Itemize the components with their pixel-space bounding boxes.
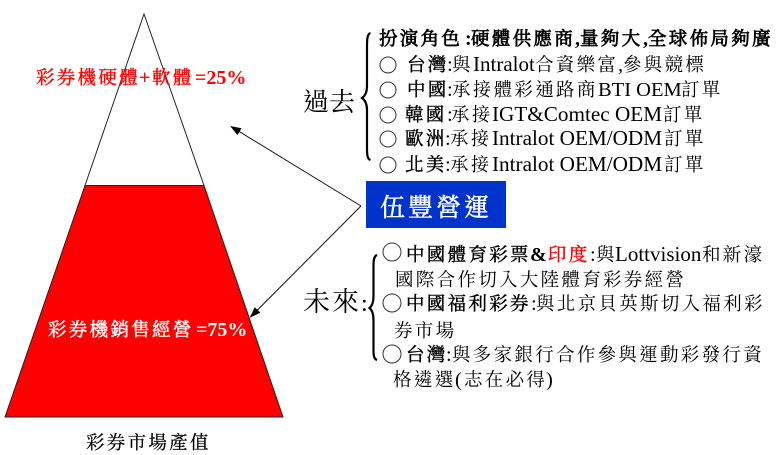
pyramid caption: 彩券市場產值 <box>86 433 211 454</box>
brace: future <box>370 255 377 360</box>
pyramid chart <box>5 14 283 454</box>
past list: China: 訂單 <box>681 80 723 101</box>
past list: Europe: 訂單 <box>664 129 706 150</box>
past list: Korea: 承接 <box>451 105 493 126</box>
past list: Europe <box>380 126 706 150</box>
label: sales operation share: 彩券機銷售經營 <box>48 320 194 341</box>
heading: past: 過去 <box>303 88 355 117</box>
label: hardware and software share: 軟體 <box>152 68 194 89</box>
future item: China sports lottery and India <box>383 242 764 291</box>
panel: future <box>303 242 765 391</box>
future item: China welfare lottery: 與北京貝英斯切入福利彩 <box>536 294 765 315</box>
past role line: 扮演角色 <box>379 28 462 50</box>
label: hardware and software share: 彩券機硬體 <box>36 68 140 89</box>
future item: China welfare lottery: : <box>531 293 537 315</box>
future item: China sports lottery and India: 和新濠 <box>702 245 764 266</box>
past list: North America: 北美 <box>405 155 447 176</box>
past list: Taiwan: 台灣 <box>407 55 449 76</box>
past list: Taiwan: 參與競標 <box>623 55 706 76</box>
future item: China sports lottery and India: & <box>530 244 547 266</box>
future item: Taiwan: 與多家銀行合作參與運動彩發行資 <box>452 345 764 366</box>
future item: Taiwan <box>383 344 764 391</box>
past list: Europe: 歐洲 <box>405 129 447 150</box>
past list: Taiwan <box>380 52 706 76</box>
past list: China: 承接體彩通路商 <box>452 80 598 101</box>
brace: past <box>362 33 370 160</box>
company name box <box>366 181 506 228</box>
future item: Taiwan: ) <box>546 369 553 391</box>
past list: Korea: : <box>447 104 453 126</box>
past list: Europe: : <box>445 128 451 150</box>
future item: Taiwan: 志在必得 <box>464 370 547 391</box>
past list: Taiwan: Intralot <box>473 52 535 76</box>
future item: China welfare lottery: 中國福利彩券 <box>406 294 531 315</box>
label: hardware and software share: =25% <box>195 67 246 89</box>
label: sales operation share: =75% <box>196 319 247 341</box>
past role line: 量夠大 <box>580 29 642 50</box>
past list: North America: Intralot OEM/ODM <box>492 152 662 176</box>
heading: future: : <box>361 291 370 317</box>
past list: Korea: IGT&Comtec OEM <box>492 102 662 126</box>
past list: China: : <box>447 79 453 101</box>
past list: China <box>380 79 723 101</box>
future item: China welfare lottery: 券市場 <box>394 321 456 342</box>
past role line: , <box>575 28 580 50</box>
past list: Taiwan: , <box>618 54 623 76</box>
past list: North America: 承接 <box>450 155 492 176</box>
future item: Taiwan: ( <box>455 369 462 391</box>
past role line: : <box>465 28 472 50</box>
pyramid top segment <box>85 14 204 186</box>
future item: China welfare lottery <box>383 293 765 342</box>
heading: future: 未來 <box>303 287 361 317</box>
future item: Taiwan: : <box>446 344 452 366</box>
future item: China sports lottery and India: 印度 <box>548 245 590 266</box>
past list: China: BTI OEM <box>598 79 682 101</box>
arrow: to upper pyramid <box>231 126 361 206</box>
past list: Taiwan: 與 <box>452 55 473 76</box>
future item: China sports lottery and India: : <box>590 244 596 266</box>
future item: Taiwan: 台灣 <box>406 345 448 366</box>
company name box: 伍豐營運 <box>380 194 492 222</box>
past list: North America: : <box>445 154 451 176</box>
arrow: to lower pyramid <box>250 206 361 317</box>
past list: China: 中國 <box>407 80 449 101</box>
future item: China sports lottery and India: 中國體育彩票 <box>406 245 531 266</box>
past role line: 全球佈局夠廣 <box>648 29 773 50</box>
past list: Taiwan: 合資樂富 <box>535 54 618 76</box>
past list: Taiwan: : <box>447 54 453 76</box>
past list: North America <box>380 152 706 176</box>
past list: Korea: 韓國 <box>405 105 447 126</box>
label: hardware and software share: + <box>139 67 150 89</box>
future item: China sports lottery and India: 與 <box>596 245 617 266</box>
past list: North America: 訂單 <box>664 155 706 176</box>
future item: China sports lottery and India: 國際合作切入大陸體育彩券經營 <box>395 270 686 291</box>
future item: China sports lottery and India: Lottvision <box>615 242 702 266</box>
panel: past <box>303 28 773 176</box>
past list: Korea <box>380 102 705 126</box>
past role line: , <box>643 28 648 50</box>
past list: Europe: 承接 <box>450 129 492 150</box>
past list: Europe: Intralot OEM/ODM <box>492 126 662 150</box>
past list: Korea: 訂單 <box>663 105 705 126</box>
pyramid bottom segment <box>5 186 283 417</box>
past role line: 硬體供應商 <box>471 29 575 50</box>
future item: Taiwan: 格遴選 <box>393 370 455 391</box>
